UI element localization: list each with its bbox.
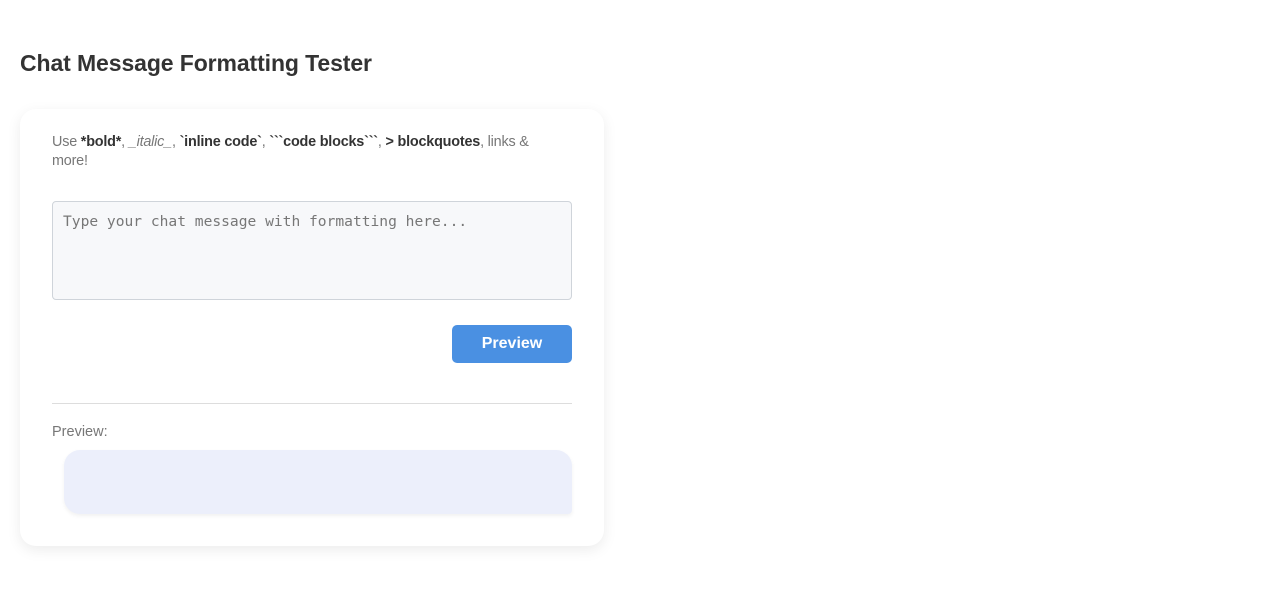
panel: tester card xyxy=(20,109,604,546)
instructions text: Use *bold*, _italic_, `inline code`, ```code blocks```, > blockquotes, links & more! xyxy=(52,134,529,169)
textarea: Type your chat message with formatting here... xyxy=(63,213,467,230)
button: preview xyxy=(452,325,572,363)
button: preview: Preview xyxy=(482,335,542,352)
title: Chat Message Formatting Tester xyxy=(20,50,372,76)
preview bubble xyxy=(64,450,572,514)
textarea xyxy=(52,201,572,300)
preview label: Preview: xyxy=(52,424,108,440)
